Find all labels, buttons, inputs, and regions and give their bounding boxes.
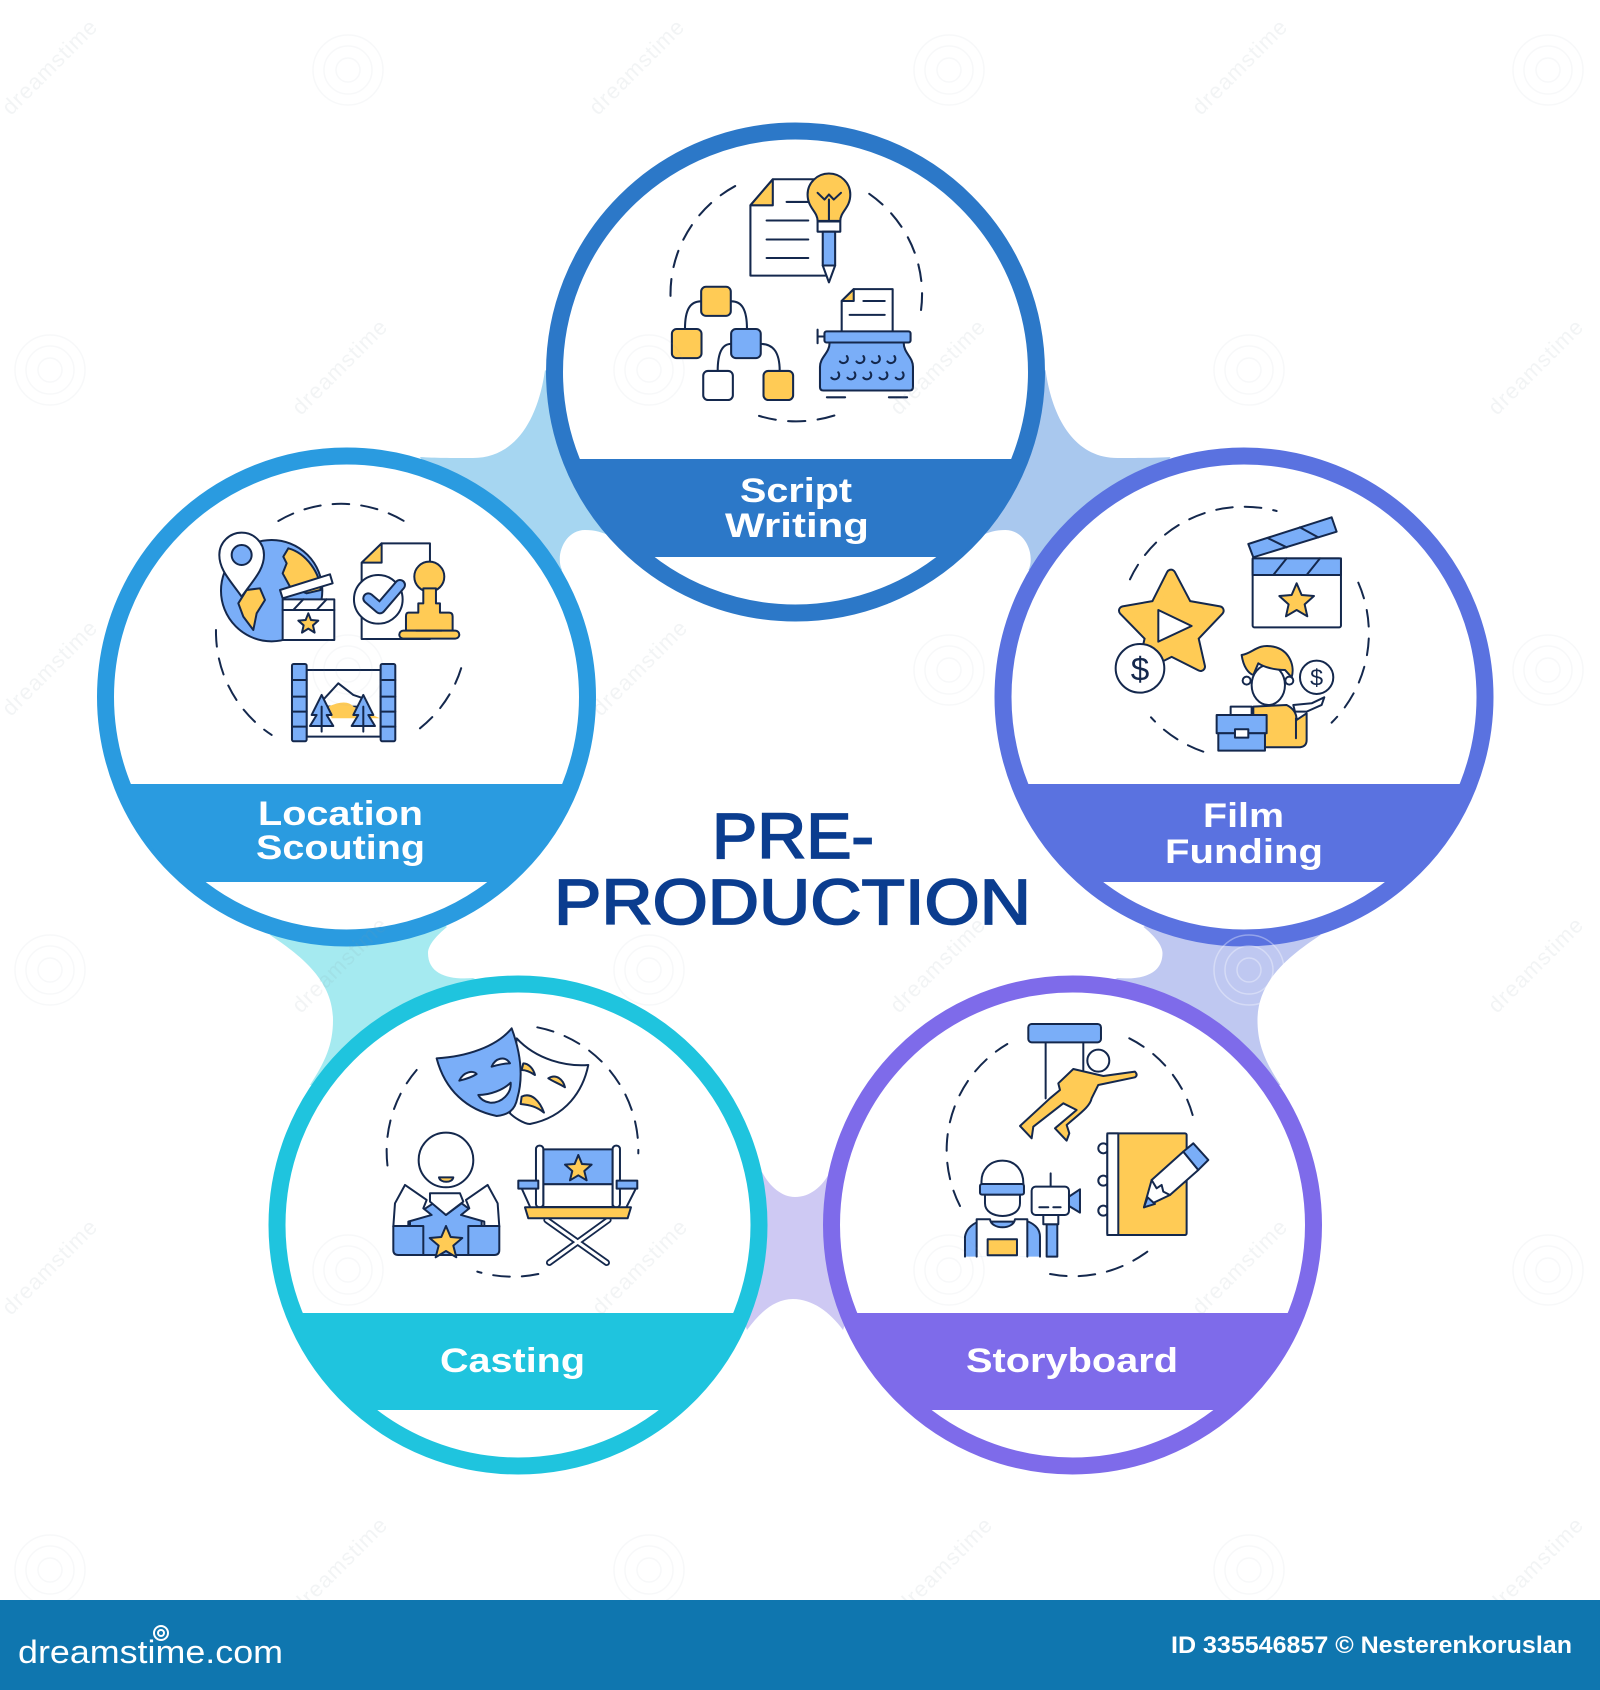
watermark text: dreamstime: [584, 14, 690, 120]
dashed ring: [216, 504, 462, 735]
icon: document with pen bulb: [750, 174, 850, 282]
icon: clapperboard: [1248, 517, 1341, 627]
watermark text: dreamstime: [287, 314, 393, 420]
watermark text: dreamstime: [1483, 912, 1589, 1018]
label band: [857, 1313, 1288, 1410]
icon: globe with pin and clapper: [219, 533, 334, 641]
panel: film funding: [990, 456, 1500, 938]
icon: stunt performer on wires: [1020, 1024, 1137, 1141]
logo spiral mark: [154, 1626, 168, 1640]
title: PRODUCTION: [554, 866, 1031, 938]
label: Script Writing: Writing: [725, 507, 869, 545]
label: Casting: Casting: [440, 1342, 585, 1380]
label: Film Funding: Film: [1203, 797, 1284, 835]
connector: location scouting to casting: [270, 850, 520, 1100]
icon: star with play button and coin: $: [1131, 652, 1149, 689]
icon: star with play button and coin: [1116, 574, 1219, 693]
connector: script writing to location scouting: [420, 370, 640, 600]
label: Script Writing: Script: [740, 472, 852, 510]
panel: location scouting: [90, 456, 600, 938]
icon: director chair: [518, 1146, 637, 1263]
dashed ring: [1130, 507, 1369, 752]
title: PRE-: [712, 800, 874, 872]
panel: script writing: [540, 131, 1050, 613]
label: Storyboard: Storyboard: [966, 1342, 1178, 1380]
icon: actor with star: [393, 1133, 499, 1257]
icon: film strip with landscape: [292, 664, 395, 741]
watermark text: dreamstime: [1187, 1214, 1293, 1320]
label band: [1028, 784, 1460, 882]
icon group: stunt, camera operator, notebook: [947, 1024, 1208, 1276]
footer bar: [0, 1600, 1600, 1690]
circle ring: [554, 131, 1036, 613]
icon: document with check and stamp: [354, 543, 459, 639]
circle ring: [106, 456, 588, 938]
watermark text: dreamstime: [587, 615, 693, 721]
label band: [131, 784, 562, 882]
watermark text: dreamstime: [287, 912, 393, 1018]
label: Location Scouting: Scouting: [256, 829, 425, 867]
watermark text: dreamstime: [587, 1214, 693, 1320]
icon group: globe, stamp, film: [216, 504, 462, 741]
icon: theatre masks: [437, 1028, 588, 1124]
icon group: script, flowchart, typewriter: [670, 174, 922, 421]
watermark text: dreamstime: [885, 314, 991, 420]
label band: [302, 1313, 734, 1410]
icon group: star, clapper, investor: [1116, 507, 1369, 752]
watermark text: dreamstime: [885, 912, 991, 1018]
dashed ring: [947, 1038, 1193, 1276]
connector: casting to storyboard: [720, 1172, 870, 1330]
circle ring: [277, 984, 759, 1466]
circle ring: [832, 984, 1314, 1466]
watermark text: dreamstime: [1483, 1512, 1589, 1618]
dashed ring: [387, 1027, 638, 1277]
icon: investor with briefcase and coin: [1217, 646, 1333, 751]
icon: typewriter: [818, 289, 913, 397]
watermark text: dreamstime: [1483, 314, 1589, 420]
icon group: masks, actor, chair: [387, 1027, 638, 1277]
footer credit: ID 335546857 © Nesterenkoruslan: [1171, 1632, 1572, 1659]
icon: camera operator: [965, 1161, 1080, 1257]
icon: investor with briefcase and coin: $: [1310, 665, 1323, 691]
dashed ring: [670, 184, 922, 421]
panel: casting: [260, 984, 770, 1466]
icon: notebook with pencil: [1098, 1133, 1208, 1235]
label: Location Scouting: Location: [258, 795, 423, 833]
label band: [580, 459, 1011, 557]
panel: storyboard: [815, 984, 1330, 1466]
icon: flowchart: [672, 287, 793, 400]
connector: script writing to film funding: [950, 370, 1170, 600]
watermark text: dreamstime: [287, 1512, 393, 1618]
connector: film funding to storyboard: [1070, 850, 1320, 1100]
watermark text: dreamstime: [892, 1512, 998, 1618]
watermark text: dreamstime: [1187, 14, 1293, 120]
label: Film Funding: Funding: [1165, 833, 1323, 871]
circle ring: [1003, 456, 1485, 938]
footer logo: dreamstime.com: [18, 1634, 283, 1670]
